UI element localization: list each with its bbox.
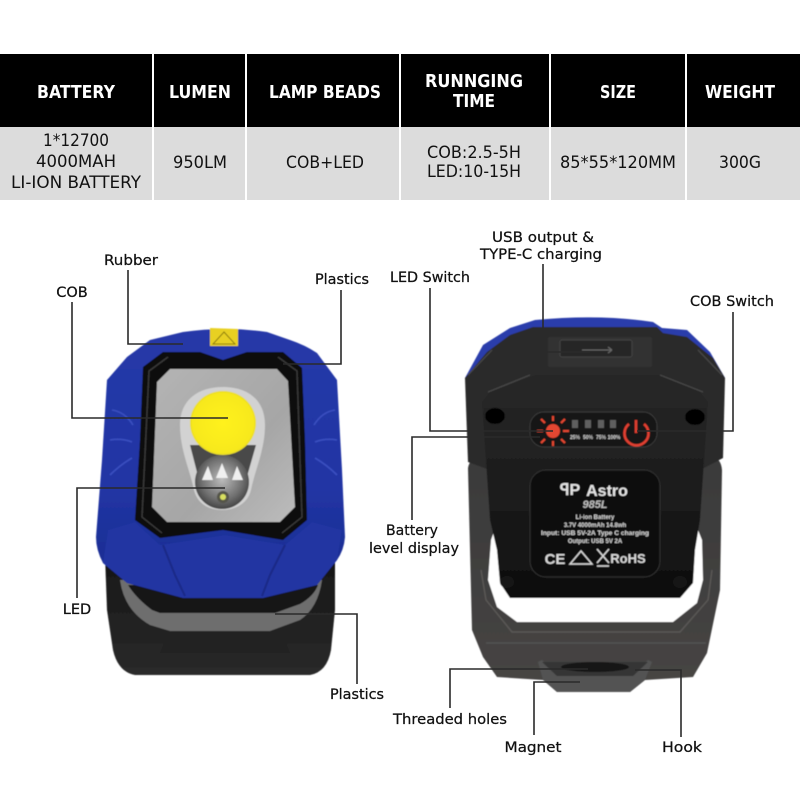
- callout: Hook: [635, 670, 703, 756]
- product label: Input: USB 5V-2A Type C charging: [541, 531, 649, 537]
- table value row: 300G: [719, 153, 761, 172]
- callout: USB output and TYPE-C charging: USB output &: [492, 230, 594, 246]
- callout: Battery level display: [369, 437, 540, 557]
- callout: USB output and TYPE-C charging: TYPE-C charging: [479, 247, 602, 263]
- callout: COB: COB: [56, 285, 88, 301]
- handle: [468, 457, 722, 692]
- callout: LED Switch: [390, 270, 553, 431]
- warning sticker: [210, 328, 238, 346]
- callout: Threaded holes: [392, 669, 588, 728]
- table header row: RUNNGING: [425, 71, 523, 92]
- icon: LED sun: [537, 416, 569, 446]
- switch panel: [530, 412, 657, 447]
- callout: Rubber: [104, 253, 183, 344]
- COB chip: [190, 391, 256, 455]
- callout: LED: [63, 488, 225, 618]
- product label: RoHS: [610, 551, 646, 566]
- product label: ꟼP: [560, 482, 580, 499]
- callout: Plastics top: [283, 272, 369, 364]
- table value row: COB:2.5-5H: [427, 143, 521, 162]
- table value row: 4000MAH: [36, 152, 116, 171]
- table header row: LAMP BEADS: [269, 82, 381, 103]
- grey hinge: [120, 580, 322, 631]
- battery level indicators: 100%: [608, 435, 621, 441]
- product label: Output: USB 5V 2A: [568, 539, 623, 545]
- table value row: [0, 127, 800, 200]
- blue housing: [96, 329, 345, 598]
- table header row: [0, 54, 800, 127]
- spec table: [0, 54, 800, 200]
- LED reflector: [195, 455, 249, 509]
- silver plate: [152, 369, 295, 522]
- white gap in handle: [488, 520, 703, 622]
- callout: Battery level display: level display: [369, 541, 459, 557]
- callout: Plastics bottom: [275, 614, 384, 703]
- battery pack: [482, 375, 708, 598]
- callout: Hook: Hook: [662, 740, 703, 756]
- icon: power: [624, 420, 648, 445]
- battery level indicators: 50%: [583, 435, 594, 441]
- callout: USB output and TYPE-C charging: [479, 230, 602, 352]
- table header row: TIME: [453, 91, 495, 112]
- table header row: SIZE: [600, 82, 636, 103]
- battery level indicators: [570, 420, 621, 441]
- USB door: [548, 337, 652, 367]
- callout: Rubber: Rubber: [104, 253, 158, 269]
- product label: Astro: [586, 483, 628, 500]
- product label: CE: [545, 551, 565, 568]
- product label: 3.7V 4000mAh 14.8wh: [564, 523, 627, 529]
- table header row: BATTERY: [37, 82, 116, 103]
- callout: LED: LED: [63, 602, 91, 618]
- screw holes: [485, 408, 705, 588]
- callout: Threaded holes: Threaded holes: [392, 712, 507, 728]
- product label: 985L: [582, 499, 608, 511]
- table value row: LI-ION BATTERY: [11, 173, 142, 192]
- table value row: LED:10-15H: [427, 162, 521, 181]
- rear housing shell: [465, 327, 725, 470]
- callout: COB Switch: [637, 294, 774, 431]
- product label: Li-ion Battery: [576, 515, 615, 521]
- table value row: 950LM: [173, 153, 227, 172]
- table header row: WEIGHT: [705, 82, 776, 103]
- table value row: 85*55*120MM: [560, 153, 676, 172]
- callout: Battery level display: Battery: [386, 523, 438, 539]
- blue edge behind: [465, 317, 725, 378]
- table value row: 1*12700: [43, 131, 109, 150]
- callout: Plastics top: Plastics: [315, 272, 369, 288]
- callout: Magnet: [504, 682, 580, 756]
- reflector surround: [180, 387, 265, 510]
- rear view lamp: [465, 317, 725, 692]
- battery level indicators: 25%: [570, 435, 581, 441]
- callout: Magnet: Magnet: [504, 740, 562, 756]
- hook notch: [538, 660, 652, 692]
- front view lamp: [96, 328, 345, 675]
- callout: Plastics bottom: Plastics: [330, 687, 384, 703]
- table header row: LUMEN: [169, 82, 231, 103]
- callout: LED Switch: LED Switch: [390, 270, 470, 286]
- product label: [530, 470, 660, 577]
- callout: COB Switch: COB Switch: [690, 294, 774, 310]
- callout: COB: [56, 285, 228, 418]
- black frame: [135, 352, 307, 540]
- black base: [105, 555, 335, 675]
- table value row: COB+LED: [286, 153, 364, 172]
- battery level indicators: 75%: [596, 435, 607, 441]
